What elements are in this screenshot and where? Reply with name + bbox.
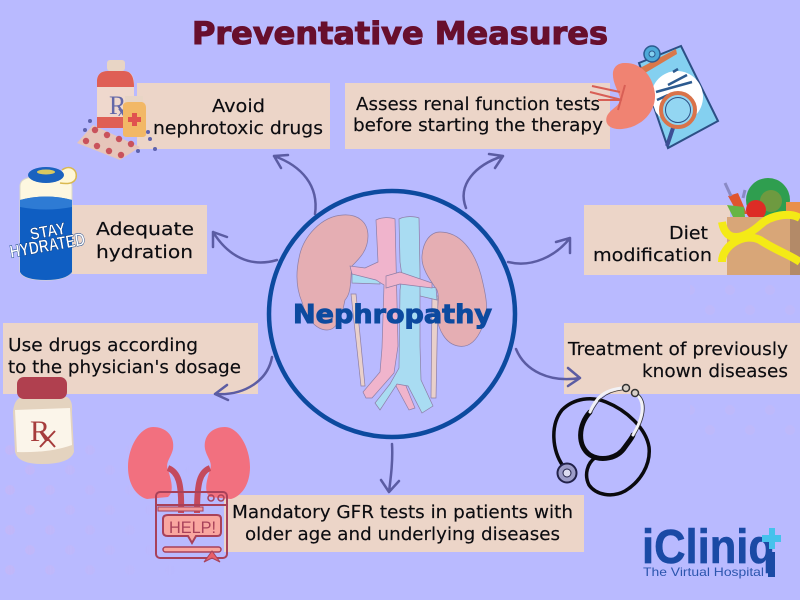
icon: medicine bottles and pills: x [118, 104, 125, 119]
arrow: to diet modification [508, 238, 570, 264]
panel: assess renal function [345, 83, 610, 149]
panel: use drugs per dosage: to the physician's dosage [8, 358, 241, 378]
panel: adequate hydration: hydration [96, 243, 193, 263]
icon: water bottle stay hydrated: HYDRATED [8, 229, 87, 262]
arrow: to physician's dosage [215, 357, 272, 400]
icon: water bottle stay hydrated: STAY [28, 219, 68, 244]
logo: iCliniq: iCliniq [642, 521, 775, 574]
icon: stethoscope [554, 384, 649, 495]
panel: assess renal function: before starting the therapy [353, 116, 603, 136]
panel: treatment of known diseases: known diseases [642, 362, 788, 382]
panel: diet modification: Diet [669, 224, 708, 244]
panel: assess renal function: Assess renal function tests [356, 95, 600, 115]
panel: avoid nephrotoxic drugs [137, 83, 330, 149]
panel: mandatory GFR tests: older age and underlying diseases [245, 525, 560, 545]
arrow: to renal function tests [464, 154, 503, 208]
arrow: to GFR tests [381, 444, 399, 492]
icon: clipboard and kidney [590, 46, 718, 148]
icon: medicine bottles and pills: R [109, 91, 127, 120]
label: nephropathy: Nephropathy [293, 300, 492, 330]
icon: medicine bottles and pills [77, 60, 157, 160]
logo tagline: The Virtual Hospital [643, 565, 764, 579]
icon: kidneys and help window [128, 427, 250, 562]
panel: adequate hydration [72, 205, 207, 274]
panel: diet modification: modification [593, 246, 712, 266]
title: Preventative Measures [192, 16, 608, 52]
panel: diet modification [584, 205, 730, 275]
icon: prescription bottle [13, 377, 74, 464]
panel: mandatory GFR tests [224, 495, 584, 552]
arrow: to treatment of known diseases [516, 349, 580, 386]
panel: avoid nephrotoxic drugs: nephrotoxic drugs [153, 119, 323, 139]
central circle: nephropathy [269, 191, 515, 437]
icon: grocery bag with measuring tape [722, 178, 800, 275]
panel: adequate hydration: Adequate [96, 220, 194, 240]
icon: water bottle stay hydrated [8, 167, 87, 280]
panel: treatment of known diseases: Treatment of previously [567, 340, 788, 360]
panel: mandatory GFR tests: Mandatory GFR tests in patients with [232, 503, 573, 523]
icon: kidneys and help window: HELP! [169, 518, 216, 537]
panel: treatment of known diseases [564, 323, 800, 394]
arrows [213, 154, 580, 492]
arrow: to adequate hydration [213, 232, 277, 262]
icon: prescription bottle: R [30, 415, 50, 448]
illustration: kidneys and vessels [297, 215, 487, 413]
arrow: to avoid nephrotoxic drugs [274, 155, 316, 214]
panel: use drugs per dosage [3, 323, 258, 394]
panel: avoid nephrotoxic drugs: Avoid [212, 97, 265, 117]
panel: use drugs per dosage: Use drugs according [8, 336, 198, 356]
